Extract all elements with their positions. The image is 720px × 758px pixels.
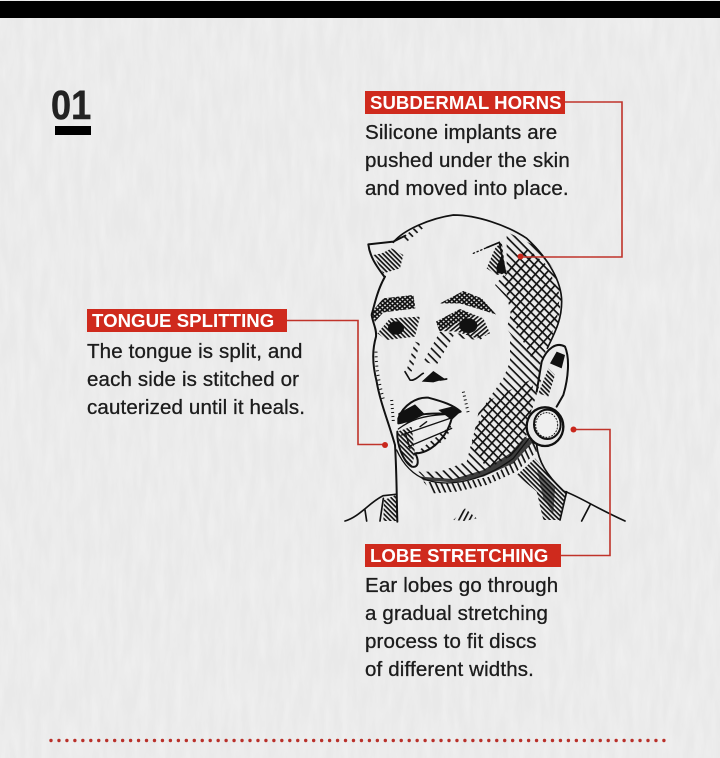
- face edge tick marks: [376, 352, 384, 402]
- left side of face: [372, 277, 397, 522]
- mouth upper lip: [398, 398, 461, 423]
- description: [365, 574, 558, 681]
- callout: lobe stretching: [365, 544, 561, 681]
- eye shadows: [436, 309, 490, 338]
- jaw line: [397, 435, 532, 483]
- ear: [537, 345, 568, 407]
- connector: tongue splitting: [287, 320, 388, 448]
- left shoulder: [345, 494, 396, 521]
- callout: tongue splitting: [87, 309, 305, 419]
- nostril: [422, 371, 445, 382]
- description: Ear lobes go through: [365, 574, 558, 597]
- label: LOBE STRETCHING: [370, 545, 548, 566]
- right eyebrow: [440, 291, 496, 314]
- dotted footer rule: [51, 739, 668, 742]
- description: [365, 121, 570, 200]
- tongue: [397, 418, 452, 467]
- description: [87, 340, 305, 419]
- neck right line and shoulder: [537, 445, 625, 521]
- right horn: [473, 242, 499, 253]
- nose outline: [405, 372, 447, 380]
- description: and moved into place.: [365, 177, 569, 200]
- cheek and jaw hatching: [418, 335, 542, 480]
- callout: subdermal horns: [365, 91, 570, 200]
- description: of different widths.: [365, 658, 534, 681]
- section number 01: 01: [51, 82, 91, 128]
- connector: subdermal horns: [518, 102, 622, 260]
- left eyebrow: [371, 295, 415, 322]
- description: process to fit discs: [365, 630, 537, 653]
- head outline: [393, 215, 562, 348]
- left horn: [368, 236, 405, 277]
- nose shading: [423, 332, 455, 365]
- description: Silicone implants are: [365, 121, 557, 144]
- head illustration: [344, 214, 626, 523]
- neck shading: [517, 458, 567, 520]
- top black bar: [0, 1, 720, 18]
- horn shading: [487, 242, 506, 275]
- description: each side is stitched or: [87, 368, 299, 391]
- description: pushed under the skin: [365, 149, 570, 172]
- ear plug disc: [527, 407, 563, 446]
- brow tick marks under left eye: [457, 333, 487, 340]
- label: TONGUE SPLITTING: [92, 310, 274, 331]
- description: cauterized until it heals.: [87, 396, 305, 419]
- label: SUBDERMAL HORNS: [370, 92, 562, 113]
- ear shading: [550, 352, 565, 368]
- cranium cross-hatching: [371, 223, 567, 521]
- number underline: [55, 126, 91, 135]
- description: a gradual stretching: [365, 602, 548, 625]
- connector: lobe stretching: [561, 426, 610, 556]
- description: The tongue is split, and: [87, 340, 303, 363]
- collar hatching: [383, 495, 397, 521]
- eyes: [388, 321, 404, 335]
